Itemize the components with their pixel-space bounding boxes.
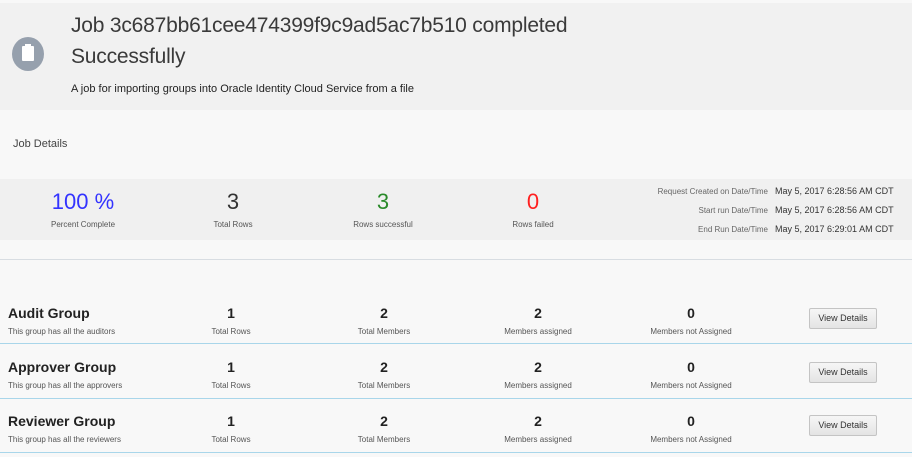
row: reviewer group: Total Rows	[211, 435, 251, 444]
row: approver group: 2	[380, 359, 388, 375]
row: audit group: 2	[534, 305, 542, 321]
stats panel: May 5, 2017 6:28:56 AM CDT	[775, 205, 894, 215]
row: audit group: Members assigned	[504, 327, 572, 336]
row: approver group: 1	[227, 359, 235, 375]
row: reviewer group: View Details	[818, 420, 868, 430]
stats panel: End Run Date/Time	[698, 225, 768, 234]
row: audit group: View Details	[818, 313, 868, 323]
stat: failed: 0	[527, 189, 539, 214]
stat: successful	[353, 189, 413, 229]
stat: percent	[51, 189, 115, 229]
row: audit group: Total Members	[358, 327, 410, 336]
row: approver group: This group has all the approvers	[8, 381, 122, 390]
row: approver group: Total Rows	[211, 381, 251, 390]
row: approver group: Approver Group	[8, 359, 116, 375]
stats panel: May 5, 2017 6:28:56 AM CDT	[775, 186, 894, 196]
row: reviewer group: This group has all the reviewers	[8, 435, 121, 444]
stat: percent: 100 %	[52, 189, 114, 214]
stat: total rows: 3	[227, 189, 239, 214]
row: reviewer group: 2	[534, 413, 542, 429]
row: approver group: Members not Assigned	[650, 381, 732, 390]
stats panel	[0, 179, 912, 240]
row: approver group: Members assigned	[504, 381, 572, 390]
stats panel: Start run Date/Time	[698, 206, 768, 215]
row: approver group	[8, 359, 877, 390]
row: audit group: Total Rows	[211, 327, 251, 336]
row: reviewer group: Total Members	[358, 435, 410, 444]
row: reviewer group: 1	[227, 413, 235, 429]
stats panel: Request Created on Date/Time	[658, 187, 768, 196]
stat: total rows	[213, 189, 253, 229]
row: audit group: 2	[380, 305, 388, 321]
row: reviewer group	[8, 413, 877, 444]
row: approver group: View Details	[818, 367, 868, 377]
stat: successful: 3	[377, 189, 389, 214]
row: audit group: 0	[687, 305, 695, 321]
row: audit group: 1	[227, 305, 235, 321]
stats panel: May 5, 2017 6:29:01 AM CDT	[775, 224, 894, 234]
stat: percent: Percent Complete	[51, 220, 115, 229]
icon: clipboard	[12, 37, 44, 71]
row: reviewer group: 2	[380, 413, 388, 429]
stat: failed: Rows failed	[512, 220, 554, 229]
row: reviewer group: Members not Assigned	[650, 435, 732, 444]
title: Successfully	[71, 45, 185, 68]
row: audit group: This group has all the auditors	[8, 327, 115, 336]
row: approver group: 2	[534, 359, 542, 375]
row: approver group: Total Members	[358, 381, 410, 390]
dates	[658, 186, 894, 234]
header panel	[0, 3, 912, 110]
row: audit group	[8, 305, 877, 336]
row: reviewer group: 0	[687, 413, 695, 429]
row: approver group: 0	[687, 359, 695, 375]
row: audit group: Members not Assigned	[650, 327, 732, 336]
row: reviewer group: Reviewer Group	[8, 413, 115, 429]
heading: job details: Job Details	[13, 138, 67, 150]
row: audit group: Audit Group	[8, 305, 90, 321]
stat: successful: Rows successful	[353, 220, 413, 229]
stat: total rows: Total Rows	[213, 220, 253, 229]
title: Job 3c687bb61cee474399f9c9ad5ac7b510 completed	[71, 14, 567, 37]
row: reviewer group: Members assigned	[504, 435, 572, 444]
stat: failed	[512, 189, 554, 229]
subtitle: A job for importing groups into Oracle Identity Cloud Service from a file	[71, 83, 414, 95]
title	[71, 14, 567, 68]
